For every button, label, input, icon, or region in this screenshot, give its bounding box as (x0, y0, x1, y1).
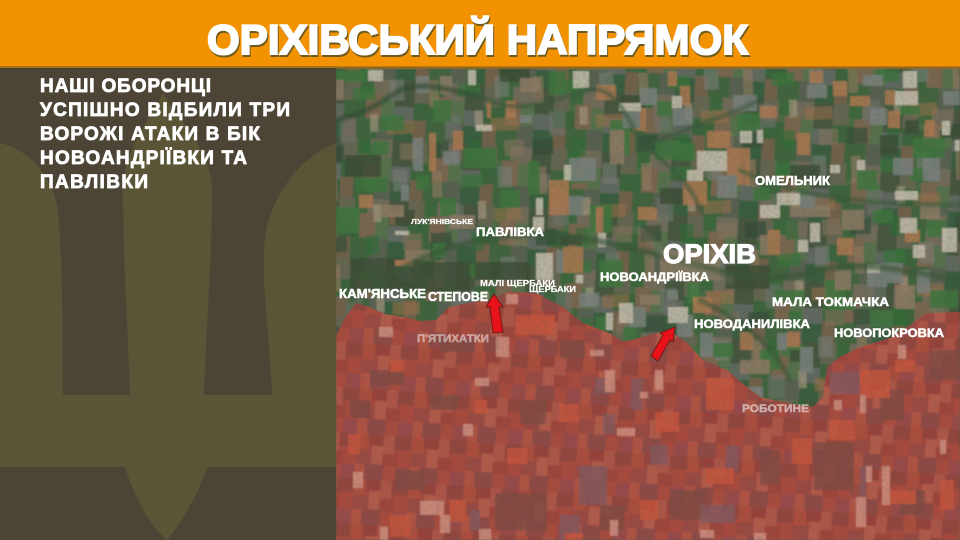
label: Mala Tokmachka: МАЛА ТОКМАЧКА (772, 295, 889, 309)
label: Piatykhatky: П'ЯТИХАТКИ (417, 333, 489, 345)
occupied territory overlay (336, 290, 960, 540)
summary text: НОВОАНДРІЇВКИ ТА (40, 148, 247, 169)
label: Stepove: СТЕПОВЕ (428, 290, 488, 304)
terrain ridges and tree lines (336, 86, 960, 380)
label: Pavlivka: ПАВЛІВКА (476, 225, 544, 239)
label: Lukianivske: ЛУК'ЯНІВСЬКЕ (411, 217, 473, 226)
label: Novodanylivka: НОВОДАНИЛІВКА (694, 317, 810, 331)
label: Novopokrovka: НОВОПОКРОВКА (834, 326, 944, 340)
summary text (40, 76, 290, 193)
title shadow: ОРІХІВСЬКИЙ НАПРЯМОК (208, 17, 749, 65)
label: Omelnyk: ОМЕЛЬНИК (755, 174, 830, 188)
label: Mali Shcherbaky: МАЛІ ЩЕРБАКИ (480, 278, 555, 288)
label: Shcherbaky: ЩЕРБАКИ (529, 284, 576, 294)
summary text: НАШІ ОБОРОНЦІ (40, 76, 211, 97)
header bar (0, 0, 960, 69)
arrow: attack toward Novoandriivka (651, 327, 675, 361)
label: Novoandriivka: НОВОАНДРІЇВКА (600, 269, 709, 284)
summary text: УСПІШНО ВІДБИЛИ ТРИ (40, 100, 290, 121)
satellite map (336, 68, 960, 540)
label: Orikhiv: ОРІХІВ (663, 239, 756, 269)
summary text: ПАВЛІВКИ (40, 172, 148, 193)
label: Kamianske: КАМ'ЯНСЬКЕ (339, 287, 426, 301)
left panel with trident emblem (0, 68, 337, 540)
title: ОРІХІВСЬКИЙ НАПРЯМОК (207, 15, 748, 63)
map labels (339, 174, 944, 415)
summary text: ВОРОЖІ АТАКИ В БІК (40, 124, 260, 145)
arrow: attack toward Mali Shcherbaky (486, 294, 503, 333)
label: Robotyne: РОБОТИНЕ (742, 403, 809, 415)
icon: trident watermark (0, 93, 337, 540)
satellite texture (336, 68, 960, 540)
